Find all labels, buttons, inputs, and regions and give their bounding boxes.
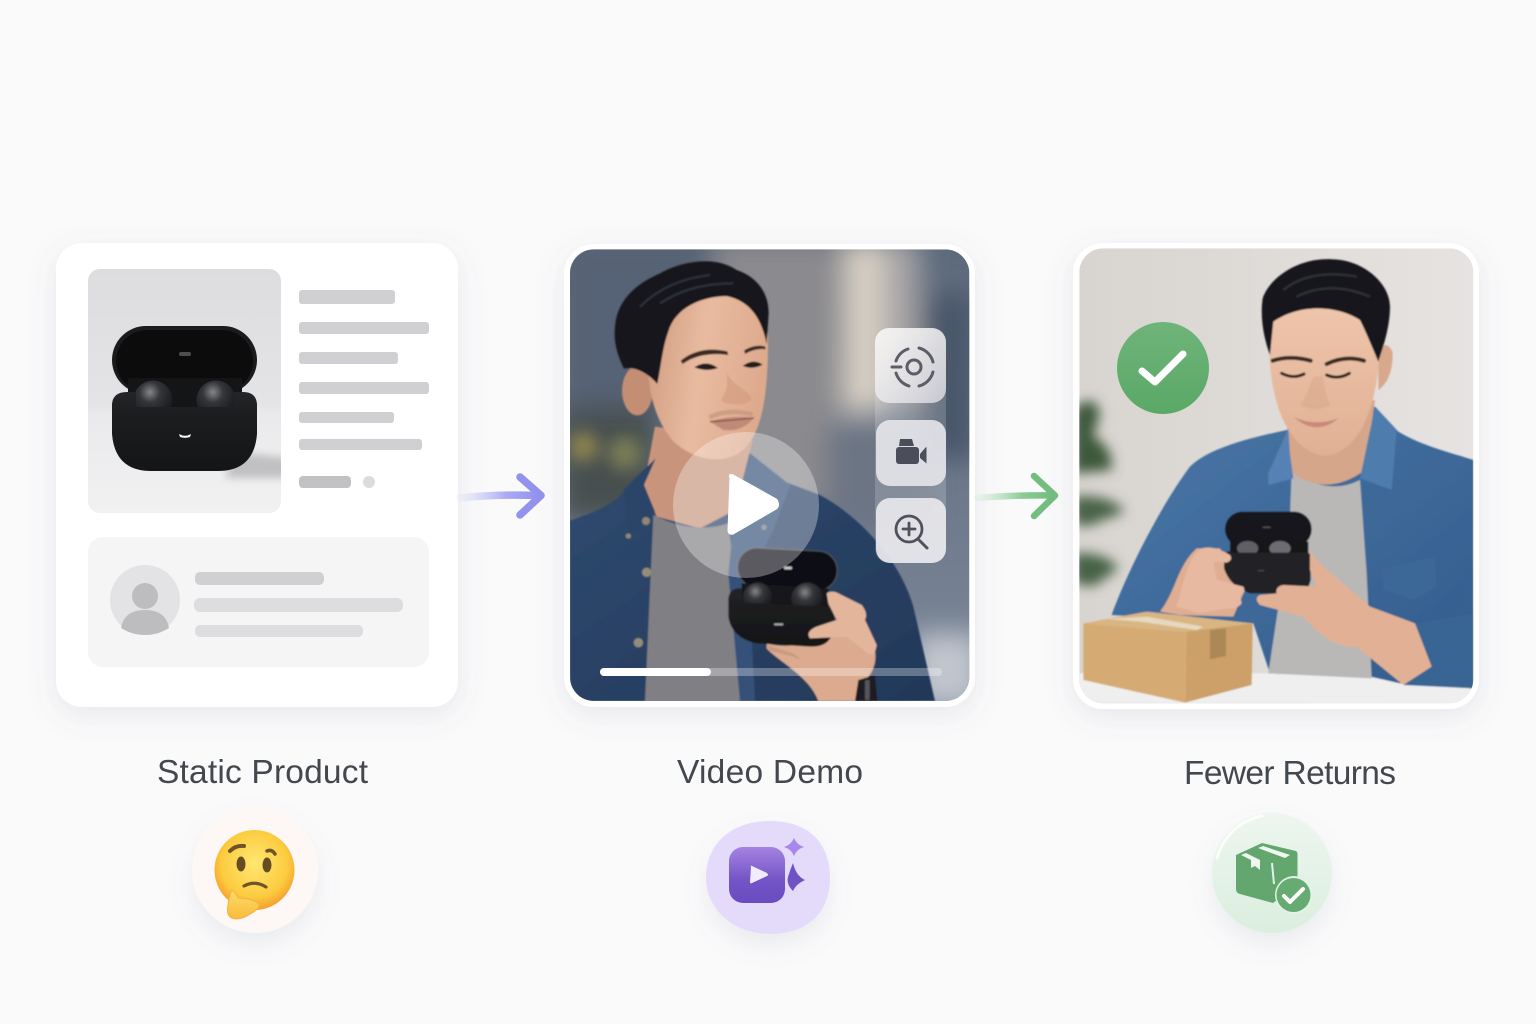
- left hand: [1160, 548, 1243, 617]
- tool panel: [875, 328, 946, 563]
- product photo: earbuds case: [88, 269, 290, 513]
- fingers: [1177, 547, 1244, 613]
- photo: man unboxing earbuds: [1073, 248, 1473, 703]
- video photo: man holding earbuds: [560, 240, 980, 707]
- hand behind case: [765, 636, 877, 701]
- icon: target: [875, 328, 946, 403]
- mouth: [710, 417, 754, 430]
- icon: green check badge: [1117, 322, 1209, 414]
- box: [1083, 612, 1253, 632]
- panel: fewer returns card: [1073, 243, 1479, 709]
- progress bar: [600, 668, 942, 676]
- icon: video sparkle badge: [706, 821, 830, 934]
- arrow: video to returns: [977, 476, 1055, 516]
- ear and face: [622, 366, 653, 415]
- ear and face: [1378, 345, 1393, 390]
- collars: [1268, 428, 1293, 485]
- review panel: [88, 537, 429, 667]
- neck and tee: [644, 427, 753, 528]
- label: fewer returns: Fewer Returns: [1184, 755, 1396, 792]
- earbuds case: [1225, 512, 1312, 547]
- panel: static product page: [56, 243, 458, 707]
- hair: [1262, 259, 1390, 362]
- icon: video camera: [876, 420, 946, 486]
- arrow: static to video: [460, 477, 541, 515]
- shirt: [1112, 407, 1473, 688]
- right hand and forearm: [1257, 552, 1432, 685]
- facial features: [1273, 358, 1311, 361]
- icon: zoom in: [876, 498, 946, 563]
- watch: [855, 675, 877, 701]
- hair: [615, 261, 769, 384]
- buttons: [642, 517, 650, 525]
- collar and placket: [624, 458, 656, 512]
- brows and eyes: [681, 350, 728, 364]
- label: static product: Static Product: [157, 754, 369, 791]
- panel: video demo card: [560, 240, 980, 707]
- label: video demo: Video Demo: [677, 754, 863, 791]
- tee: [1268, 470, 1372, 678]
- pocket: [1382, 557, 1437, 600]
- shirt: [570, 453, 935, 701]
- placeholder text lines: [299, 290, 429, 488]
- earbuds case: [736, 547, 838, 591]
- icon: box with check badge: [1212, 813, 1332, 933]
- neck: [1287, 400, 1375, 485]
- fingers: [808, 592, 877, 654]
- play button: [673, 432, 819, 578]
- right sleeve cuff: [1403, 674, 1473, 689]
- table: [1079, 673, 1473, 703]
- icon: confused face badge: [192, 807, 318, 933]
